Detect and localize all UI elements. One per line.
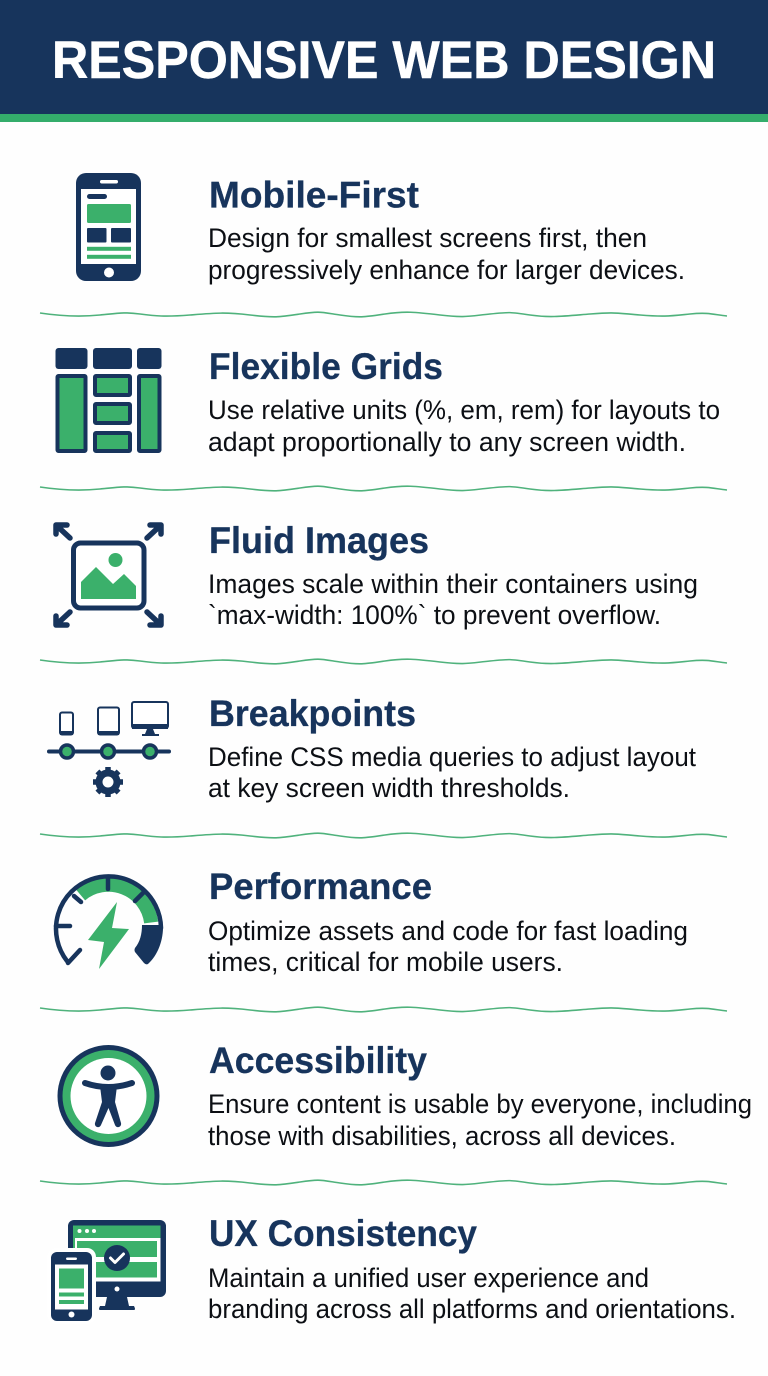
heading: mobile-first: Mobile-First [209, 174, 419, 216]
text: mobile-first: Design for smallest screens first, then [208, 223, 647, 253]
panel: fluid images [56, 520, 698, 630]
panel: performance [56, 866, 688, 977]
text: ux consistency [208, 1263, 736, 1324]
icon: monitor and phone [47, 1220, 166, 1324]
text: performance [208, 916, 688, 977]
icon: scaling image [56, 525, 161, 625]
text: mobile-first [208, 223, 685, 285]
text: flexible grids: adapt proportionally to any screen width. [208, 427, 686, 457]
text: fluid images: `max-width: 100%` to prevent overflow. [208, 600, 661, 630]
heading: ux consistency: UX Consistency [209, 1213, 477, 1254]
panel: flexible grids [56, 346, 720, 457]
heading: fluid images: Fluid Images [209, 520, 429, 561]
icon: smartphone layout [76, 173, 141, 281]
heading: flexible grids: Flexible Grids [209, 346, 443, 387]
panel: mobile-first [76, 173, 685, 285]
icon: accessibility figure [58, 1045, 160, 1147]
header banner [0, 0, 768, 122]
text: accessibility: Ensure content is usable by everyone, including [208, 1089, 752, 1119]
text: breakpoints [208, 742, 696, 803]
panel: ux consistency [47, 1213, 736, 1324]
text: fluid images: Images scale within their containers using [208, 569, 698, 599]
text: flexible grids [208, 395, 720, 457]
icon: grid layout [56, 348, 162, 451]
text: performance: Optimize assets and code for fast loading [208, 916, 688, 946]
text: ux consistency: Maintain a unified user experience and [208, 1263, 649, 1293]
title: RESPONSIVE WEB DESIGN [52, 31, 716, 90]
text: fluid images [208, 569, 698, 630]
text: breakpoints: Define CSS media queries to adjust layout [208, 742, 696, 772]
panel: breakpoints [47, 693, 696, 803]
heading: performance: Performance [209, 866, 432, 907]
text: flexible grids: Use relative units (%, em, rem) for layouts to [208, 395, 720, 425]
panel: accessibility [58, 1040, 752, 1151]
icon: speed gauge [56, 876, 163, 969]
icon: device breakpoints [47, 702, 171, 797]
text: ux consistency: branding across all platforms and orientations. [208, 1294, 736, 1324]
heading: breakpoints: Breakpoints [209, 693, 416, 734]
text: breakpoints: at key screen width thresholds. [208, 773, 570, 803]
heading: accessibility: Accessibility [209, 1040, 427, 1081]
text: mobile-first: progressively enhance for larger devices. [208, 255, 685, 285]
text: accessibility [208, 1089, 752, 1151]
text: performance: times, critical for mobile users. [208, 947, 563, 977]
text: accessibility: those with disabilities, across all devices. [208, 1121, 676, 1151]
